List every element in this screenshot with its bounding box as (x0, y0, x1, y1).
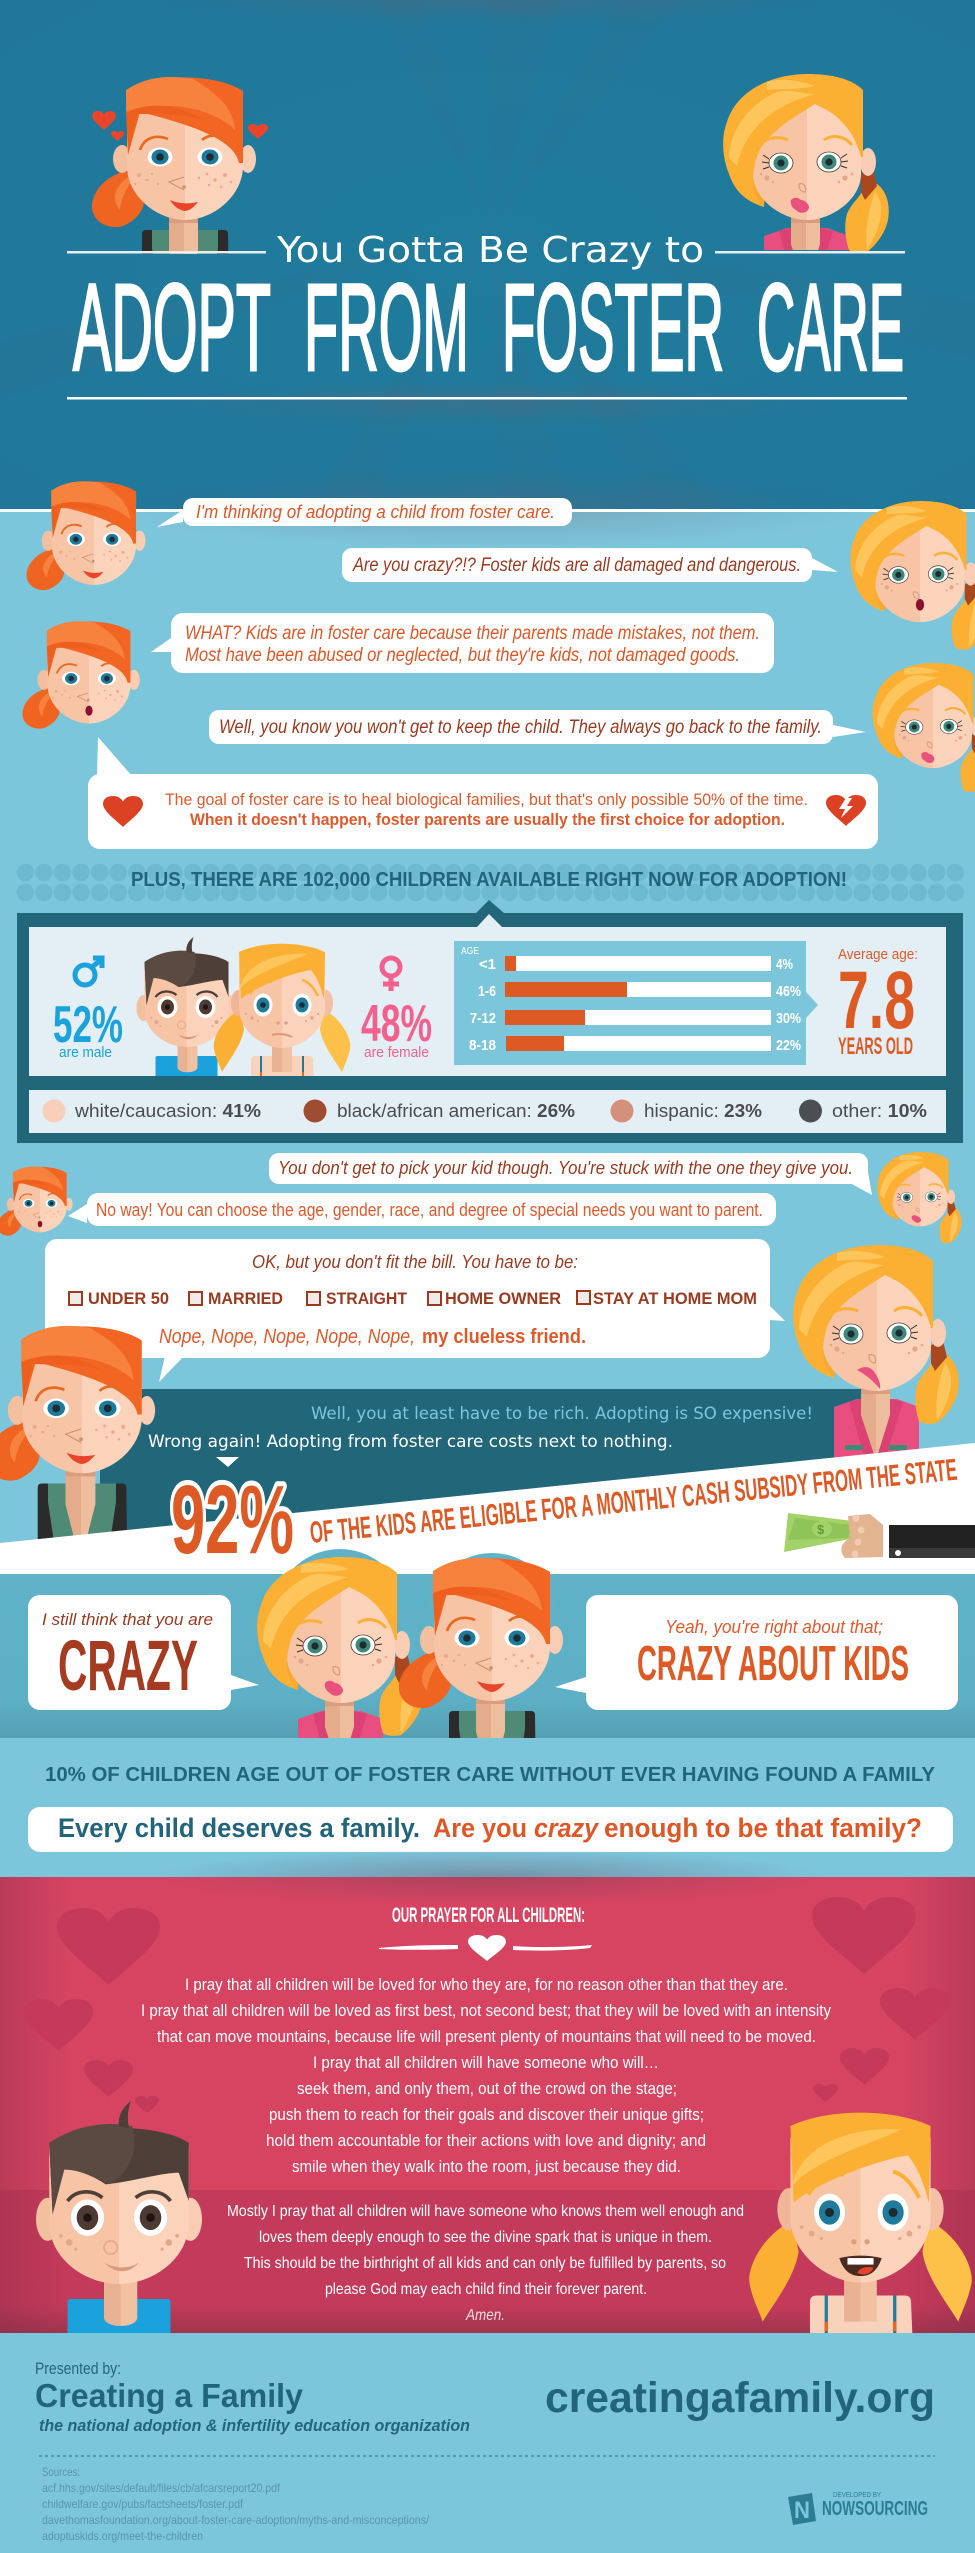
speech bubble 1 (157, 498, 572, 527)
speech bubble 3: WHAT? Kids are in foster care because their parents made mistakes, not them. (185, 623, 760, 644)
character: girl (prayer) (749, 2113, 972, 2341)
character: large red-haired woman (0, 1326, 155, 1564)
panel: cost dark band (100, 1389, 861, 1539)
bar: 7-12: 7-12 (470, 1010, 496, 1027)
legend: race: other: 10% (832, 1101, 927, 1121)
prayer text: hold them accountable for their actions with love and dignity; and (266, 2132, 706, 2150)
speech bubble 7 (68, 1193, 776, 1226)
text: wrong again: Wrong again! Adopting from foster care costs next to nothing. (148, 1432, 673, 1452)
stat: average age (838, 946, 918, 1060)
speech bubble 1: I'm thinking of adopting a child from foster care. (196, 502, 555, 522)
logo: NowSourcing: NOWSOURCING (822, 2498, 928, 2520)
bar: 1-6 (478, 982, 801, 1000)
icon: broken heart (826, 795, 866, 826)
illustration: boy (136, 937, 236, 1080)
icon: white heart with brush strokes (379, 1935, 592, 1961)
prayer text: Mostly I pray that all children will have someone who knows them well enough and (227, 2203, 744, 2220)
speech bubble 2 (342, 548, 838, 582)
speech bubble 5: The goal of foster care is to heal biological families, but that's only possible 50% of the time. (165, 790, 808, 809)
stat: 52% male (53, 996, 123, 1061)
speech bubble 6 (269, 1153, 872, 1195)
character: blonde woman, dialogue 2 (873, 663, 975, 792)
checklist: STRAIGHT (326, 1289, 408, 1308)
prayer text: seek them, and only them, out of the crowd on the stage; (297, 2080, 677, 2098)
character: small red-haired woman (0, 1167, 73, 1236)
checklist: HOME OWNER (445, 1289, 561, 1308)
panel: call to action: crazy (534, 1813, 600, 1843)
speech bubble 7: No way! You can choose the age, gender, race, and degree of special needs you want to parent. (96, 1200, 763, 1220)
icon: heart (103, 796, 143, 827)
prayer text (141, 1976, 832, 2324)
title rule left (67, 251, 266, 254)
presenter block: Presented by: (35, 2360, 121, 2378)
prayer text: smile when they walk into the room, just because they did. (292, 2158, 681, 2176)
dotted band (16, 863, 964, 903)
sources: adoptuskids.org/meet-the-children (42, 2529, 203, 2543)
panel: call to action: Are you (433, 1813, 527, 1843)
icon: female symbol (382, 958, 400, 991)
bar: 8-18: 8-18 (469, 1037, 496, 1054)
bar: 8-18: 22% (776, 1037, 801, 1054)
panel: call to action: 10% OF CHILDREN AGE OUT OF FOSTER CARE WITHOUT EVER HAVING FOUND A FAMILY (45, 1764, 936, 1786)
speech bubble: crazy about kids (555, 1595, 958, 1710)
checklist (69, 1289, 757, 1308)
sources: Sources: (42, 2465, 80, 2479)
speech bubble: still crazy: I still think that you are (42, 1610, 213, 1629)
speech bubble 3: Most have been abused or neglected, but they're kids, not damaged goods. (185, 645, 740, 666)
title rule right (715, 251, 905, 254)
icon: hand with cash (784, 1513, 975, 1558)
bar: under 1 (479, 956, 793, 973)
character: red-haired woman, dialogue 2 (22, 621, 140, 729)
stat: average age: Average age: (838, 946, 918, 963)
prayer text: This should be the birthright of all kids and can only be fulfilled by parents, so (244, 2255, 726, 2272)
panel: header (0, 0, 975, 549)
title line 2: ADOPT (73, 260, 271, 397)
panel: statistics (17, 900, 963, 1143)
sources: davethomasfoundation.org/about-foster-care-adoption/myths-and-misconceptions/ (42, 2513, 430, 2527)
legend: race (42, 1100, 927, 1122)
website: creatingafamily.org (545, 2374, 935, 2422)
panel: call to action: Every child deserves a family. (58, 1813, 420, 1843)
icon: smile (170, 200, 198, 211)
character: red-haired woman (header) (92, 77, 268, 254)
panel: call to action (0, 1738, 975, 1878)
prayer text: I pray that all children will have someone who will… (313, 2054, 659, 2072)
logo: NowSourcing (788, 2490, 928, 2525)
logo: NowSourcing: N (794, 2497, 810, 2524)
panel: requirements bubble: OK, but you don't fit the bill. You have to be: (252, 1252, 578, 1272)
legend: race: hispanic: 23% (644, 1101, 762, 1121)
panel: call to action: enough to be that family? (604, 1813, 922, 1843)
character: large blonde woman (793, 1245, 959, 1477)
icon: love hearts (92, 111, 268, 141)
bar chart: age: AGE (461, 946, 479, 957)
title line 2 (73, 260, 904, 397)
prayer text: please God may each child find their forever parent. (325, 2281, 647, 2298)
presenter block: the national adoption & infertility education organization (39, 2417, 470, 2435)
checklist: UNDER 50 (88, 1289, 169, 1308)
prayer text: Amen. (465, 2307, 505, 2324)
sources: acf.hhs.gov/sites/default/files/cb/afcarsreport20.pdf (42, 2481, 281, 2495)
sources (42, 2465, 430, 2543)
stat: 52% male: are male (59, 1044, 112, 1061)
speech bubble 4 (209, 710, 866, 744)
prayer heading: OUR PRAYER FOR ALL CHILDREN: (392, 1904, 585, 1927)
halo behind heads (270, 1549, 410, 1701)
panel: subsidy white banner (0, 1443, 975, 1574)
speech bubble 4: Well, you know you won't get to keep the child. They always go back to the family. (219, 717, 822, 738)
prayer text: push them to reach for their goals and discover their unique gifts; (269, 2106, 704, 2124)
character: blonde woman, dialogue 1 (850, 501, 975, 649)
presenter block (35, 2360, 470, 2435)
speech bubble: still crazy (28, 1595, 259, 1710)
bar: 1-6: 1-6 (478, 983, 496, 1000)
panel: requirements bubble (45, 1239, 785, 1382)
prayer text: loves them deeply enough to see the divine spark that is unique in them. (259, 2229, 712, 2246)
stat: average age: 7.8 (838, 955, 915, 1046)
bar: under 1: 4% (776, 956, 793, 973)
legend: race: black/african american: 26% (337, 1101, 575, 1121)
speech bubble: still crazy: CRAZY (58, 1627, 198, 1706)
prayer text: I pray that all children will be loved for who they are, for no reason other than that they are. (185, 1976, 788, 1994)
character: red-haired woman (closing) (399, 1558, 563, 1789)
presenter block: Creating a Family (35, 2377, 304, 2414)
character: small blonde woman (877, 1152, 962, 1243)
sources: childwelfare.gov/pubs/factsheets/foster.pdf (42, 2497, 244, 2511)
character: blonde woman (closing) (257, 1557, 423, 1789)
panel: prayer (0, 1849, 975, 2341)
prayer text: I pray that all children will be loved as first best, not second best; that they will be loved with an intensity (141, 2002, 832, 2020)
panel: requirements bubble: my clueless friend. (422, 1326, 586, 1348)
panel: requirements bubble: Nope, Nope, Nope, Nope, Nope, (159, 1326, 415, 1348)
character: red-haired woman, dialogue 1 (27, 481, 145, 590)
bar chart: age (454, 941, 818, 1065)
bar: 7-12 (470, 1010, 801, 1027)
icon: hand with cash: $ (817, 1522, 825, 1537)
stat: 52% male: 52% (53, 996, 123, 1054)
panel: crazy about kids (0, 1549, 975, 1738)
checklist: STAY AT HOME MOM (593, 1289, 757, 1308)
header rule (67, 397, 907, 400)
stat: 48% female: are female (364, 1044, 429, 1061)
footer background (0, 2333, 975, 2553)
icon: male symbol (75, 958, 102, 985)
bar: 1-6: 46% (776, 983, 801, 1000)
speech bubble 5 (88, 737, 878, 849)
text: rich: Well, you at least have to be rich. Adopting is SO expensive! (311, 1404, 813, 1424)
logo: NowSourcing: DEVELOPED BY (833, 2490, 881, 2499)
arrow: down to 92% (216, 1457, 239, 1467)
background hearts (24, 1897, 950, 2113)
icon: pouting lips (791, 198, 809, 213)
speech bubble 6: You don't get to pick your kid though. You're stuck with the one they give you. (278, 1158, 853, 1178)
stat: 48% female (361, 995, 432, 1061)
bar: under 1: <1 (479, 956, 496, 973)
stat: 92%: 92% (171, 1465, 294, 1574)
illustration: girl (214, 944, 350, 1084)
title line 1: You Gotta Be Crazy to (276, 230, 704, 271)
speech bubble 2: Are you crazy?!? Foster kids are all damaged and dangerous. (352, 555, 801, 576)
bar: 7-12: 30% (776, 1010, 801, 1027)
title line 2: FROM (304, 260, 469, 397)
speech bubble 5: When it doesn't happen, foster parents are usually the first choice for adoption. (190, 810, 785, 829)
speech bubble: crazy about kids: Yeah, you're right about that; (665, 1617, 883, 1637)
character: blonde woman (header) (723, 74, 889, 251)
checklist: MARRIED (208, 1289, 283, 1308)
prayer text: that can move mountains, because life will present plenty of mountains that will need to be moved. (157, 2028, 816, 2046)
legend: race: white/caucasion: 41% (74, 1101, 261, 1121)
stat: average age: YEARS OLD (838, 1033, 913, 1060)
bar: 8-18 (469, 1036, 801, 1054)
speech bubble 3 (151, 613, 774, 673)
stat: 48% female: 48% (361, 995, 432, 1053)
halo behind red head (424, 1553, 560, 1697)
heading: 102,000 children: PLUS, THERE ARE 102,000 CHILDREN AVAILABLE RIGHT NOW FOR ADOPTION! (131, 869, 847, 891)
character: boy (prayer) (36, 2101, 202, 2339)
